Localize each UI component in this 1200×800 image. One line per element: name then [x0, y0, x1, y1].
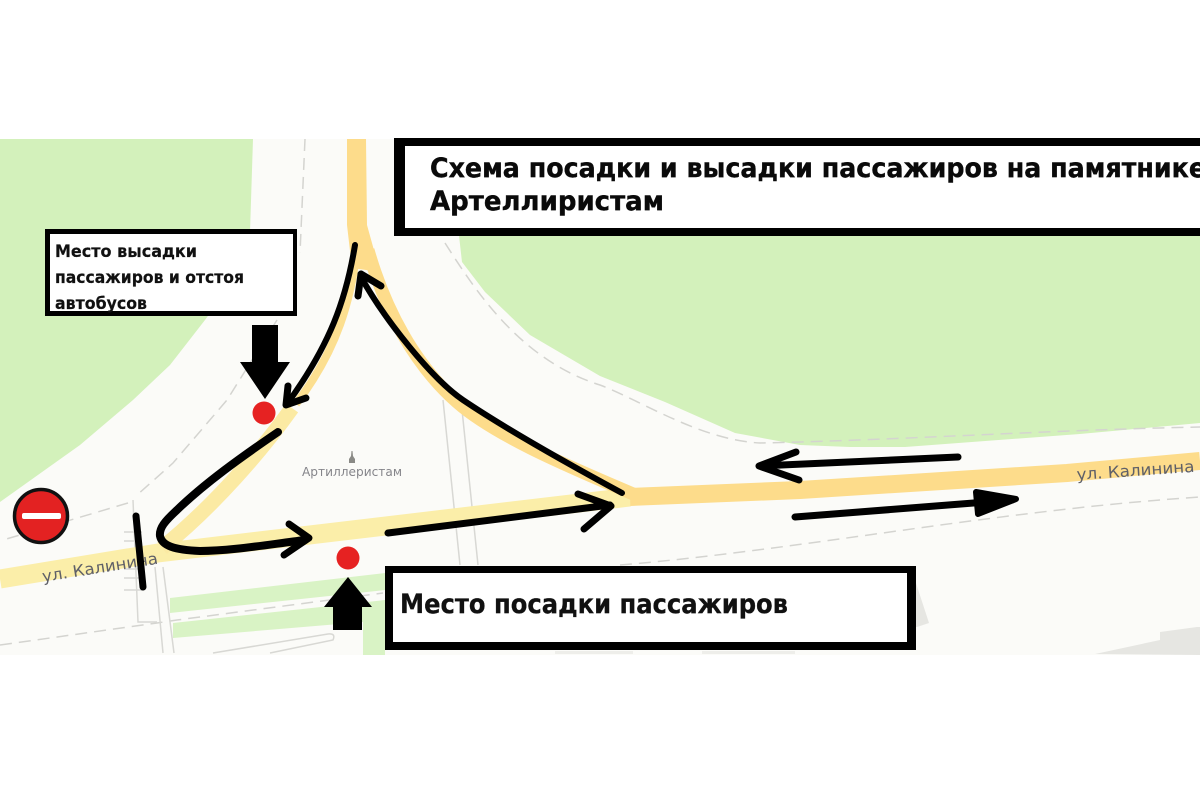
no entry sign	[14, 490, 68, 542]
road: east Kalinina	[630, 461, 1200, 497]
road: lower branch, south part	[162, 408, 292, 548]
drop-off pointer arrow	[240, 325, 290, 399]
arrow: drop-off to U-turn and east	[160, 432, 309, 555]
boarding label text: Место посадки пассажиров	[400, 589, 788, 620]
boarding pointer arrow	[324, 577, 372, 630]
title text: Артеллиристам	[430, 186, 664, 217]
barrier line	[136, 516, 143, 587]
monument label: Артиллеристам	[302, 464, 402, 479]
park: top left	[0, 139, 253, 502]
park: top right	[448, 139, 1200, 447]
buildings	[912, 580, 1200, 655]
street label: east: ул. Калинина	[1076, 457, 1195, 484]
street label: west: ул. Калинина	[41, 549, 159, 586]
road: lower branch, north part	[296, 240, 358, 404]
drop-off label text: Место высадки	[55, 242, 197, 262]
route arrows	[136, 245, 1016, 587]
drop-off point marker	[252, 402, 276, 424]
road: north	[347, 139, 380, 272]
arrow: toward junction	[388, 494, 611, 533]
drop-off label panel	[45, 229, 297, 316]
map panel	[0, 139, 1200, 655]
arrow: eastern westbound	[759, 452, 958, 480]
road: north-east branch	[368, 250, 640, 497]
arrow: north road to drop-off	[286, 245, 355, 405]
arrow: eastern eastbound	[795, 492, 1016, 517]
sidewalks	[0, 139, 1200, 645]
boarding label panel	[385, 566, 916, 650]
drop-off label text: пассажиров и отстоя	[55, 268, 244, 288]
title panel	[394, 138, 1200, 236]
monument label	[302, 451, 402, 479]
road: west Kalinina	[0, 497, 630, 579]
arrow: junction north-west	[358, 274, 622, 493]
boarding point marker	[336, 546, 360, 570]
park strips: south	[170, 573, 385, 655]
drop-off label text: автобусов	[55, 294, 147, 314]
